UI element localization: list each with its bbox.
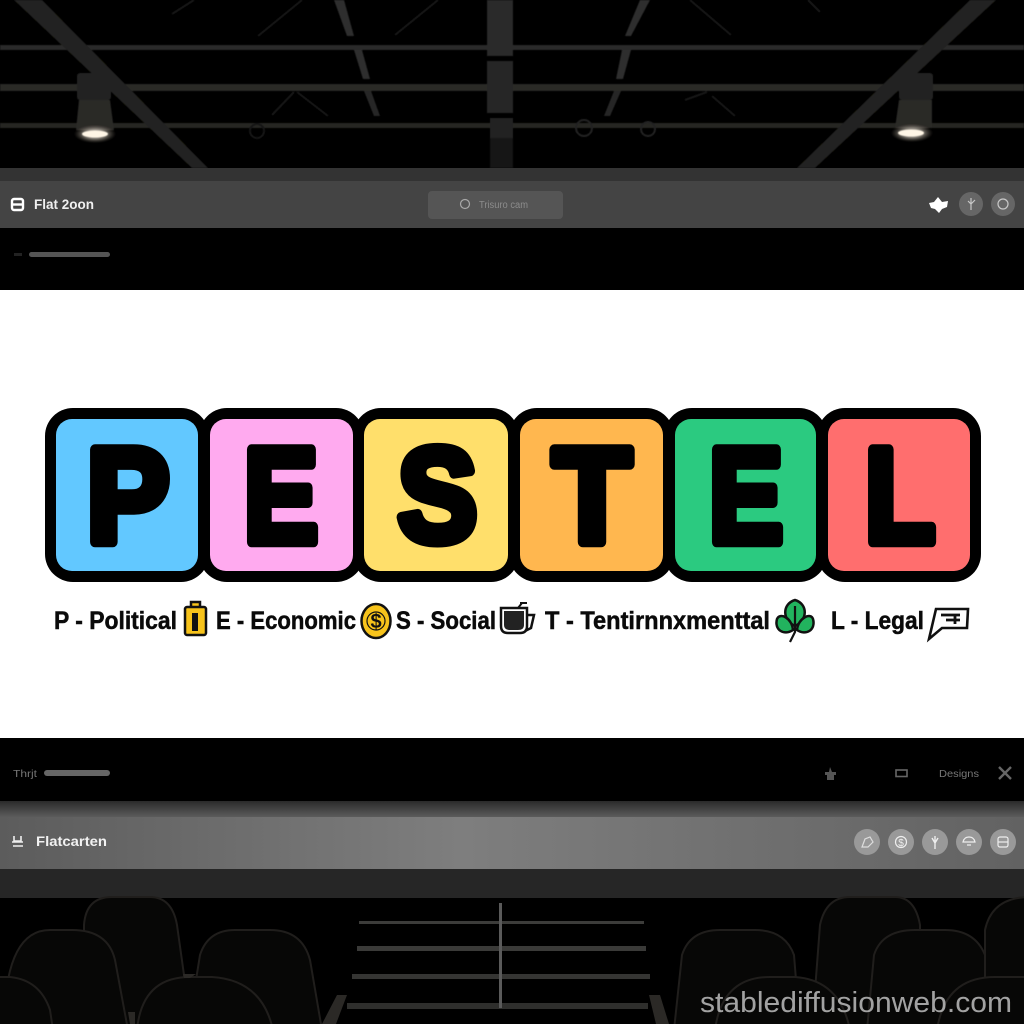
tile T: T [553,420,631,571]
icon: battery [185,602,206,635]
tile S: S [398,421,477,569]
icon: leaf [776,600,814,642]
label: political: P - Political [54,607,177,635]
tile P: P [87,422,169,571]
tile T [509,408,674,582]
tile E green: E [709,421,783,571]
watermark: stablediffusionweb.com [700,987,1012,1019]
armrests [128,974,669,1024]
label: legal: L - Legal [831,607,924,635]
label: economic: E - Economic [216,607,356,635]
tile S [353,408,519,582]
ceiling with beams and spotlights [0,0,1024,168]
toolbar circular icons: $ [898,838,904,849]
tile L [817,408,981,582]
toolbar title: Flat 2oon [34,196,94,212]
auditorium seats and steps [0,897,1024,1024]
icon: cup [501,603,534,633]
lower row [13,767,1011,780]
tile L: L [865,421,935,571]
tile P [45,408,209,582]
search box [428,191,563,219]
PESTEL title tiles [45,408,981,582]
search box: Trisuro cam [479,200,528,211]
icon: toolbar logo [11,199,24,210]
tile E green [664,408,827,582]
toolbar circular icons [854,829,1016,855]
icon: toolbar seat [12,836,23,846]
tile E [199,408,364,582]
label: social: S - Social [396,607,496,635]
upper progress row [14,252,110,257]
PESTEL legend [54,600,968,642]
icon: coin [362,604,390,638]
toolbar actions [929,192,1015,216]
white central panel [0,290,1024,738]
tile E: E [244,421,318,571]
top toolbar [0,168,1024,228]
lower row label: Thrjt [13,769,37,780]
icon: pin [825,767,836,780]
lower row designs label: Designs [939,768,979,780]
stairs [347,903,650,1009]
icon: legal document [929,609,968,639]
toolbar brand: Flatcarten [36,833,107,849]
icon: rectangle [896,770,907,776]
label: environmental: T - Tentirnnxmenttal [545,607,770,635]
icon: coin: $ [370,611,382,633]
bottom toolbar [0,801,1024,898]
icon: close [999,767,1011,779]
